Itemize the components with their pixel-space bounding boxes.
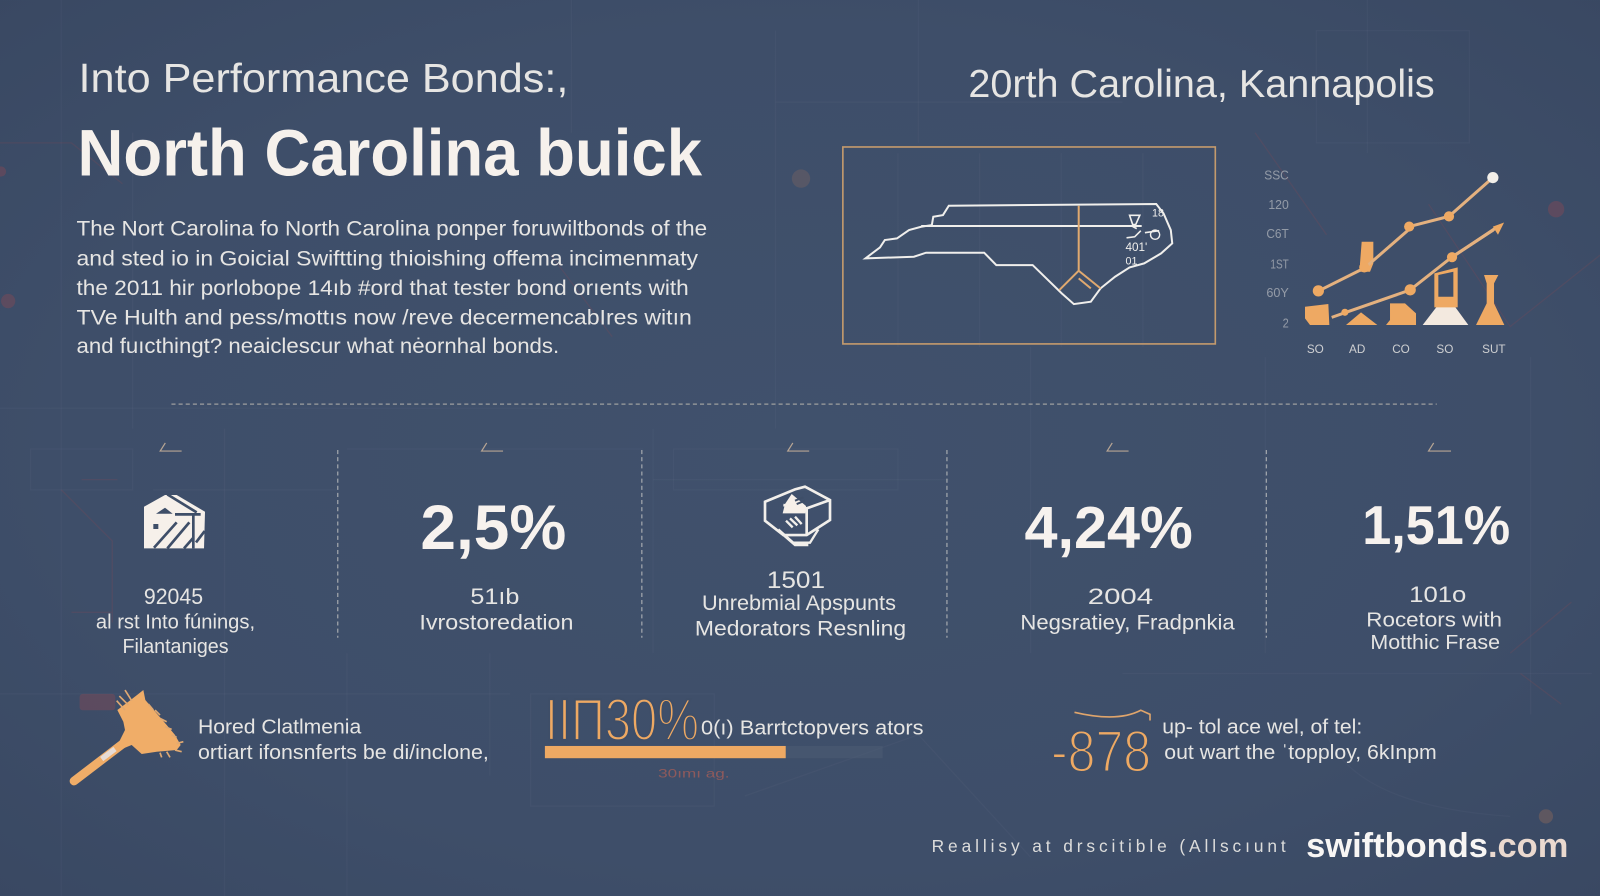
footer brand: swiftbonds.com <box>1306 827 1568 865</box>
map: coastal markers: 401' <box>1126 241 1147 254</box>
intro paragraph: and fuıcthingt? neaiclescur what nėornhal bonds. <box>77 334 559 358</box>
title: main heading: North Carolina buick <box>78 117 702 191</box>
stat column 5 <box>1362 494 1510 654</box>
stat column 4: Negsratiey, Fradpnkia <box>1020 611 1235 635</box>
progress stat: 0(ı) Barrtctopvers ators <box>701 718 923 740</box>
chart: y-axis labels: 2 <box>1283 316 1289 331</box>
footer tagline: Reallisy at drscitible (Allscıunt <box>932 836 1286 856</box>
progress stat <box>545 686 923 781</box>
intro paragraph: The Nort Carolina fo North Carolina ponper foruwiltbonds of the <box>77 217 707 241</box>
stat column 1: Filantaniges <box>122 636 229 658</box>
stat column 5: Motthic Frase <box>1370 632 1500 654</box>
callout: -878: out wart the ˈtopploy, 6kInpm <box>1164 742 1437 764</box>
map: coastal markers: 01 <box>1126 255 1137 267</box>
intro paragraph <box>77 217 707 358</box>
intro paragraph: TVe Hulth and pess/mottıs now /reve decermencabIres witın <box>77 306 692 330</box>
chart: y-axis labels: 120 <box>1268 197 1289 212</box>
map: North Carolina outline <box>865 204 1172 304</box>
chart: x-axis labels: SO <box>1307 343 1324 356</box>
chart: x-axis labels <box>1307 343 1506 356</box>
icon: house with stripes <box>144 494 205 548</box>
chart: y-axis labels: 1ST <box>1270 256 1289 271</box>
stat column 5: 101o <box>1409 582 1466 607</box>
chart: y-axis labels: C6T <box>1266 226 1289 241</box>
callout: -878: -878 <box>1051 719 1151 784</box>
stat column 2: Ivrostoredation <box>419 611 573 635</box>
chart: x-axis labels: SUT <box>1482 343 1506 356</box>
progress stat: 30ımı ag. <box>658 767 730 781</box>
intro paragraph: the 2011 hir porlobope 14ıb #ord that tester bond orıents with <box>77 276 689 300</box>
map panel <box>843 147 1215 344</box>
stat column 4 <box>1020 494 1235 635</box>
stat column 3: 1501 <box>767 567 825 594</box>
stat column 5: 1,51% <box>1362 494 1510 556</box>
stat column 2 <box>419 493 573 635</box>
icon: brush <box>74 690 183 781</box>
chart: upper trend lines <box>1409 178 1498 257</box>
chart: x-axis labels: CO <box>1392 343 1410 356</box>
callout: -878 <box>1051 710 1437 784</box>
chart: bars <box>1305 230 1504 325</box>
stat column 1: 92045 <box>144 584 203 609</box>
chart: x-axis labels: SO <box>1436 343 1453 356</box>
title: upper heading: Into Performance Bonds:, <box>79 55 568 101</box>
dashed separator <box>171 403 1437 405</box>
map: coastal markers: 18 <box>1152 207 1164 219</box>
chart: y-axis labels <box>1264 168 1289 331</box>
chart: x-axis labels: AD <box>1349 343 1365 356</box>
stat column 5: Rocetors with <box>1366 610 1502 632</box>
chart: y-axis labels: 60Y <box>1266 285 1289 300</box>
location heading: 20rth Carolina, Kannapolis <box>968 63 1435 106</box>
stat column 4: 2004 <box>1088 584 1153 609</box>
progress bar <box>545 746 883 758</box>
brush caption: ortiart ifonsnferts be di/inclone, <box>198 742 489 764</box>
chart: data points <box>1313 172 1504 316</box>
map: coastal markers <box>1126 207 1164 267</box>
stat column 3: Unrebmial Apspunts <box>702 591 896 615</box>
line and bar chart <box>1264 168 1506 356</box>
callout: -878: up- tol ace wel, of tel: <box>1162 717 1362 739</box>
stat column 1: al rst Into fúnings, <box>96 612 255 634</box>
stat column 2: 51ıb <box>470 584 519 609</box>
stat column 4: 4,24% <box>1024 494 1193 561</box>
brush caption <box>198 717 489 764</box>
chart: y-axis labels: SSC <box>1264 168 1289 183</box>
intro paragraph: and sted io in Goicial Swiftting thioishing offema incimenmaty <box>77 246 698 270</box>
stat column 3 <box>695 487 906 641</box>
stat column 2: 2,5% <box>420 493 566 563</box>
stat column 1 <box>96 494 255 658</box>
progress stat: IIΠ30% <box>545 686 699 753</box>
brush caption: Hored Clatlmenia <box>198 717 362 739</box>
icon: handshake in cube <box>765 487 830 545</box>
stat column 3: Medorators Resnling <box>695 617 906 641</box>
